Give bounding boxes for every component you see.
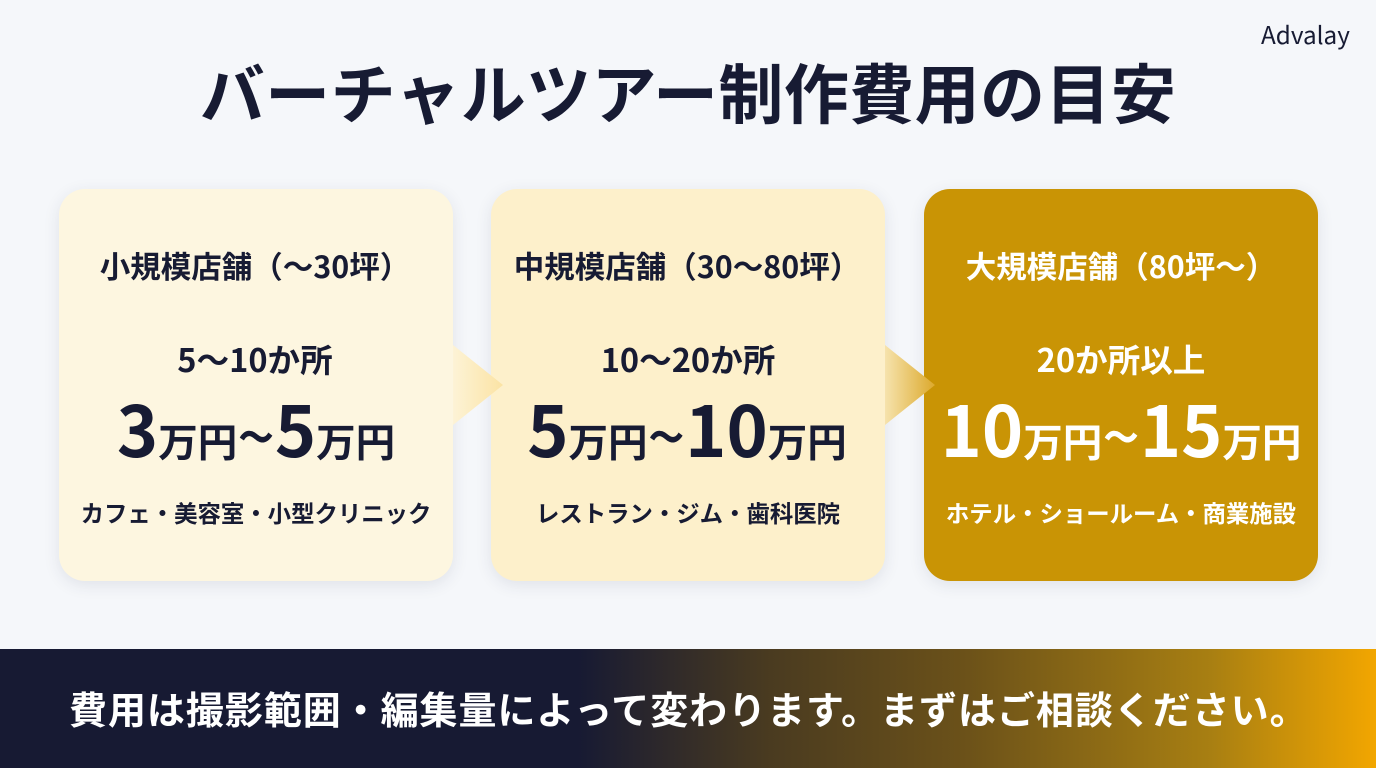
- medium store examples: レストラン・ジム・歯科医院: [536, 495, 840, 529]
- medium store locations: 10〜20か所: [601, 335, 775, 382]
- footer message: 費用は撮影範囲・編集量によって変わります。まずはご相談ください。: [69, 680, 1309, 735]
- panel: medium store: [491, 189, 885, 581]
- large store examples: ホテル・ショールーム・商業施設: [946, 495, 1296, 529]
- medium store heading: 中規模店舗（30〜80坪）: [514, 243, 860, 287]
- small store price: 3万円~5万円: [117, 377, 395, 481]
- footer banner: [0, 649, 1376, 768]
- large store locations: 20か所以上: [1037, 335, 1205, 382]
- large store price: 10万円~15万円: [941, 377, 1301, 481]
- arrow: small to medium: [453, 345, 503, 425]
- medium store price: 5万円~10万円: [527, 377, 847, 481]
- small store examples: カフェ・美容室・小型クリニック: [81, 495, 431, 529]
- small store heading: 小規模店舗（〜30坪）: [100, 243, 410, 287]
- brand logo: Advalay: Advalay: [1261, 16, 1350, 51]
- panel: large store: [924, 189, 1318, 581]
- small store locations: 5〜10か所: [177, 335, 333, 382]
- title: バーチャルツアー制作費用の目安: [200, 43, 1176, 137]
- arrow: medium to large: [885, 345, 935, 425]
- panel: small store: [59, 189, 453, 581]
- large store heading: 大規模店舗（80坪〜）: [966, 243, 1276, 287]
